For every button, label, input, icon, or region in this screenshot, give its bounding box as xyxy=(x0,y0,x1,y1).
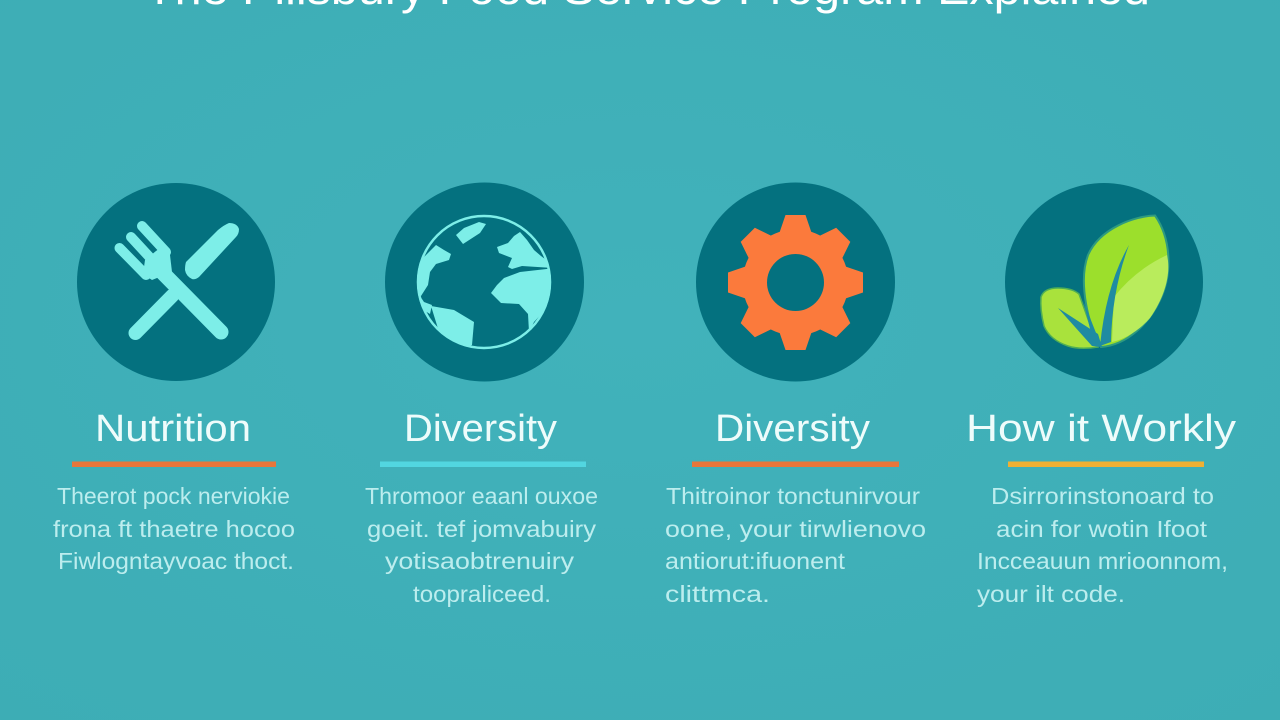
text block: Thitroinor tonctunirvour xyxy=(666,483,920,509)
accent line xyxy=(692,462,899,467)
heading: Nutrition: Nutrition xyxy=(95,408,251,450)
icon: gear xyxy=(696,182,895,382)
icon: leaves xyxy=(1005,183,1203,381)
text block: Fiwlogntayvoac thoct. xyxy=(58,548,294,574)
text block: Incceauun mrioonnom, xyxy=(977,548,1228,574)
text block xyxy=(977,483,1228,607)
text block: goeit. tef jomvabuiry xyxy=(367,516,597,542)
text block xyxy=(53,483,295,574)
heading: How it Workly: How it Workly xyxy=(966,408,1236,450)
text block: Dsirrorinstonoard to xyxy=(991,483,1214,509)
accent line xyxy=(1008,462,1204,467)
panel: diversity, globe xyxy=(365,182,598,607)
text block: frona ft thaetre hocoo xyxy=(53,516,295,542)
heading: Diversity: Diversity xyxy=(715,408,870,450)
accent line xyxy=(72,462,276,467)
text block: antiorut:ifuonent xyxy=(665,548,846,574)
text block: Thromoor eaanl ouxoe xyxy=(365,483,598,509)
text block: oone, your tirwlienovo xyxy=(665,516,926,542)
icon: globe xyxy=(385,182,584,382)
text block: Theerot pock nerviokie xyxy=(57,483,290,509)
text block: toopraliceed. xyxy=(413,581,551,607)
heading: Diversity: Diversity xyxy=(404,408,557,450)
text block xyxy=(365,483,598,607)
panel: how it works xyxy=(966,183,1236,607)
text block xyxy=(665,483,926,607)
text block: yotisaobtrenuiry xyxy=(385,548,575,574)
text block: your ilt code. xyxy=(977,581,1125,607)
text block: clittmca. xyxy=(665,581,770,607)
text block: acin for wotin Ifoot xyxy=(996,516,1208,542)
panel: diversity, gear xyxy=(665,182,926,607)
panel: nutrition xyxy=(53,183,295,574)
icon: fork and knife xyxy=(77,183,275,381)
accent line xyxy=(380,462,586,467)
